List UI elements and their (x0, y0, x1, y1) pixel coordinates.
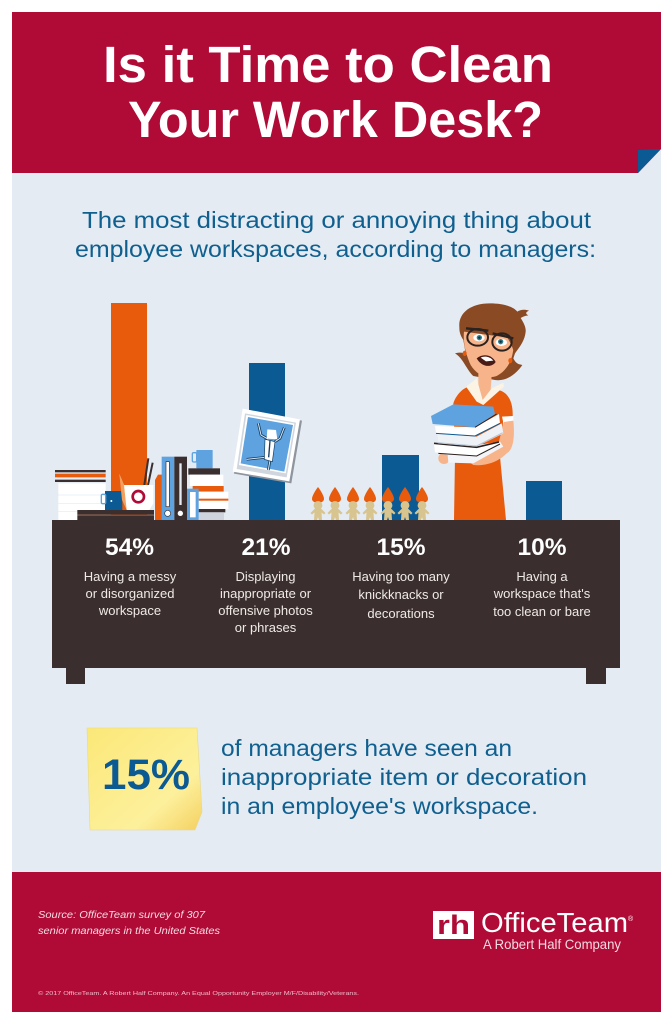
troll 1 (310, 487, 326, 520)
bar: 54% (111, 303, 147, 520)
sticky note percentage: 15% (102, 751, 190, 799)
desk feet (66, 668, 606, 684)
desk tray (77, 510, 154, 520)
illustration: frustrated woman holding books (431, 303, 529, 520)
stat: 21% inappropriate photos: 21% (242, 534, 290, 561)
face (464, 332, 514, 377)
callout text: inappropriate item or decoration (221, 764, 587, 790)
stat: 54% messy workspace: workspace (98, 603, 161, 618)
stat: 10% too clean: workspace that's (493, 586, 591, 601)
stat: 54% messy workspace (84, 534, 177, 618)
stat: 15% knickknacks: 15% (376, 534, 426, 561)
logo: OfficeTeam (481, 907, 628, 938)
source note (38, 909, 221, 937)
bar: 10% (526, 481, 562, 520)
subtitle (75, 207, 596, 262)
stat: 54% messy workspace: 54% (105, 534, 154, 561)
troll 7 (414, 487, 430, 520)
footer (12, 872, 661, 1012)
troll 5 (380, 487, 396, 520)
mug (101, 491, 122, 510)
subtitle: The most distracting or annoying thing about (82, 207, 592, 233)
blue binder (162, 457, 174, 520)
icon: row of trolls (310, 487, 430, 520)
copyright: © 2017 OfficeTeam. A Robert Half Company. An Equal Opportunity Employer M/F/Disability/Veterans. (38, 990, 359, 997)
left paper stack (55, 470, 106, 520)
neck (478, 373, 492, 403)
arm (438, 416, 514, 465)
stat: 15% knickknacks: decorations (367, 606, 435, 621)
dancing figure (247, 423, 284, 470)
dark binder (174, 457, 187, 520)
hair (455, 303, 529, 380)
pen cup (119, 458, 153, 510)
subtitle: employee workspaces, according to managers: (75, 236, 596, 262)
troll 6 (398, 487, 412, 520)
troll 3 (346, 487, 360, 520)
callout text: of managers have seen an (221, 735, 512, 761)
stat: 15% knickknacks (352, 534, 450, 621)
bar: 15% (382, 455, 419, 520)
stat: 21% inappropriate photos: inappropriate or (220, 586, 312, 601)
stat: 21% inappropriate photos: offensive photos (218, 603, 313, 618)
fringe (463, 308, 524, 350)
stat: 10% too clean: too clean or bare (493, 604, 591, 619)
desk (52, 520, 620, 684)
stat: 10% too clean (493, 534, 591, 619)
collar (466, 378, 504, 405)
logo: ® (628, 915, 634, 923)
stat: 21% inappropriate photos (218, 534, 313, 635)
logo (433, 907, 634, 952)
desk top (52, 520, 620, 668)
ears (463, 351, 512, 363)
icon: messy desk items (55, 409, 302, 520)
stat: 21% inappropriate photos: or phrases (235, 620, 297, 635)
picture frame (233, 409, 302, 483)
bar chart (111, 303, 562, 520)
sticky note callout (87, 728, 202, 830)
header banner (12, 12, 661, 173)
book stack (431, 404, 503, 463)
source note: Source: OfficeTeam survey of 307 (38, 909, 206, 921)
stat: 21% inappropriate photos: Displaying (236, 569, 295, 584)
stat: 10% too clean: 10% (518, 534, 566, 561)
stat: 10% too clean: Having a (516, 569, 568, 584)
mouth (477, 355, 496, 366)
stat: 54% messy workspace: Having a messy (84, 569, 177, 584)
stat: 15% knickknacks: Having too many (352, 569, 450, 584)
troll 4 (362, 487, 378, 520)
bar: 21% (249, 363, 285, 520)
right book stack (188, 468, 228, 520)
small blue binder (187, 489, 199, 520)
source note: senior managers in the United States (38, 925, 221, 937)
page fold corner (638, 149, 661, 173)
stat: 54% messy workspace: or disorganized (86, 586, 174, 601)
logo: rh (437, 910, 470, 940)
right cup (192, 450, 213, 468)
dress (453, 387, 513, 520)
callout text (221, 735, 587, 819)
troll 2 (328, 487, 342, 520)
callout text: in an employee's workspace. (221, 793, 538, 819)
logo: A Robert Half Company (483, 936, 621, 952)
title: Your Work Desk? (128, 91, 543, 148)
title (103, 36, 553, 148)
title: Is it Time to Clean (103, 36, 553, 93)
stat: 15% knickknacks: knickknacks or (358, 587, 444, 602)
orange book (155, 475, 162, 520)
glasses and eyes (466, 328, 513, 351)
